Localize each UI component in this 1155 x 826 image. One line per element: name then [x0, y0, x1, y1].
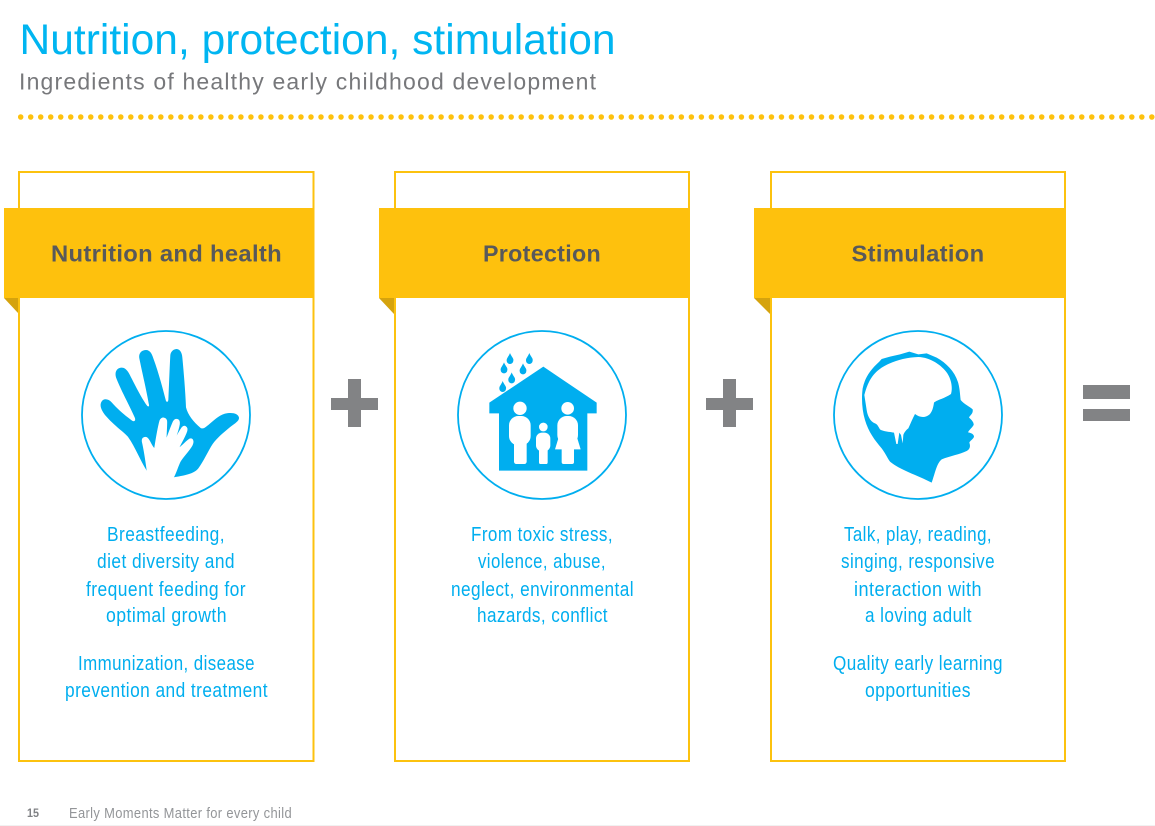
text: talk, play: singing, responsive — [841, 551, 995, 573]
plus sign 2 — [706, 379, 753, 427]
text: breastfeeding: Breastfeeding, — [107, 524, 225, 546]
ribbon heading: Stimulation — [852, 241, 984, 267]
ribbon fold — [754, 298, 770, 314]
panel frame — [19, 172, 314, 761]
equals sign — [1083, 385, 1130, 421]
text: breastfeeding — [86, 524, 246, 627]
ribbon heading — [754, 208, 1066, 298]
plus sign 1 — [331, 379, 378, 427]
text: from toxic stress: hazards, conflict — [477, 605, 608, 627]
text: breastfeeding: diet diversity and — [97, 551, 235, 573]
text: from toxic stress — [451, 524, 634, 627]
ribbon fold — [379, 298, 394, 314]
footer text: Early Moments Matter for every child — [69, 805, 292, 822]
subtitle: Ingredients of healthy early childhood development — [19, 68, 597, 94]
text: talk, play: a loving adult — [865, 605, 972, 627]
title: Nutrition, protection, stimulation — [20, 17, 616, 64]
ribbon heading: Nutrition and health — [51, 241, 282, 267]
icon: adult and child hands — [82, 331, 250, 499]
ribbon heading: Protection — [483, 241, 601, 267]
text: talk, play: Talk, play, reading, — [844, 524, 992, 546]
ribbon fold — [4, 298, 18, 313]
text: talk, play: interaction with — [854, 579, 982, 601]
text: immunization: prevention and treatment — [65, 680, 268, 702]
text: quality early learning — [833, 653, 1003, 702]
text: quality early learning: Quality early learning — [833, 653, 1003, 675]
text: from toxic stress: From toxic stress, — [471, 524, 613, 546]
panel frame — [395, 172, 689, 761]
ribbon heading — [379, 208, 690, 298]
panel frame — [771, 172, 1065, 761]
text: talk, play — [841, 524, 995, 627]
text: from toxic stress: violence, abuse, — [478, 551, 606, 573]
panel: stimulation — [754, 172, 1066, 761]
text: immunization: Immunization, disease — [78, 653, 255, 675]
text: quality early learning: opportunities — [865, 680, 971, 702]
panel: nutrition and health — [4, 172, 314, 761]
text: breastfeeding: frequent feeding for — [86, 579, 246, 601]
text: breastfeeding: optimal growth — [106, 605, 227, 627]
text: immunization — [65, 653, 268, 702]
ribbon heading — [4, 208, 314, 298]
icon: family in house with rain — [458, 331, 626, 499]
panel: protection — [379, 172, 690, 761]
page number: 15 — [27, 806, 39, 820]
icon: child head with brain — [834, 331, 1002, 499]
text: from toxic stress: neglect, environmental — [451, 579, 634, 601]
